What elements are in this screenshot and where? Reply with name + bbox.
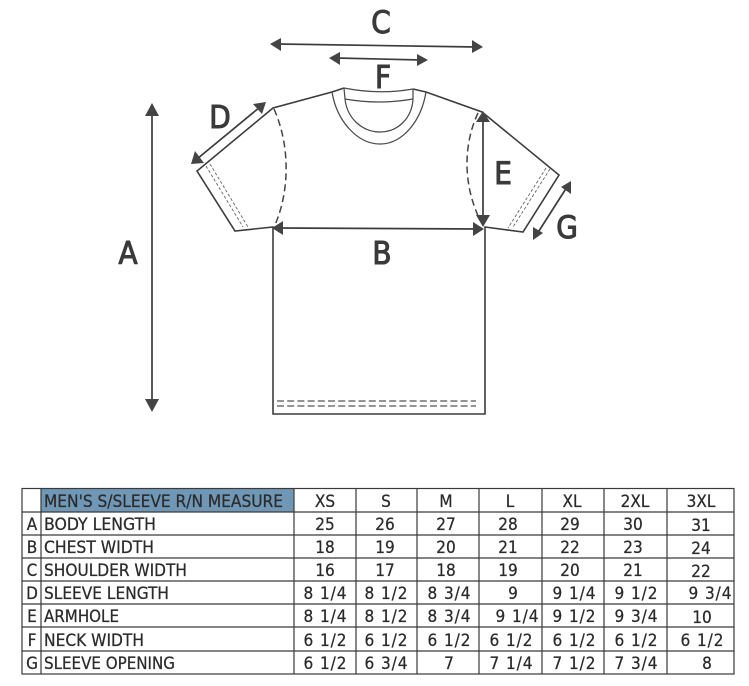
letter G: G: [556, 210, 578, 246]
row E: armhole: 9 1/4: [496, 607, 538, 627]
row C: shoulder width: SHOULDER WIDTH: [44, 561, 187, 581]
row A: body length: 26: [375, 515, 395, 535]
row D: sleeve length: 8 1/4: [304, 584, 346, 604]
row E: armhole: 8 1/4: [304, 607, 346, 627]
row G: sleeve opening: 7: [444, 654, 454, 674]
arrow B: chest width: [272, 221, 484, 236]
row F: neck width: 6 1/2: [680, 631, 724, 651]
sleeve hem stitching: [206, 164, 550, 228]
header row: S: [381, 492, 391, 512]
row C: shoulder width: 16: [315, 561, 335, 581]
row D: sleeve length: 9 1/2: [614, 584, 658, 604]
row B: chest width: 22: [560, 538, 580, 558]
row D: sleeve length: 9 3/4: [688, 584, 732, 604]
row D: sleeve length: D: [26, 584, 38, 604]
row C: shoulder width: 19: [498, 561, 518, 581]
header row: [44, 492, 716, 512]
row E: armhole: ARMHOLE: [44, 607, 119, 627]
row A: body length: 27: [436, 515, 456, 535]
arrow A: body length: [145, 103, 159, 412]
row E: armhole: 8 3/4: [428, 607, 470, 627]
row E: armhole: [27, 607, 712, 628]
header fill: [41, 488, 294, 512]
row G: sleeve opening: 7 1/4: [490, 654, 532, 674]
header row: MEN'S S/SLEEVE R/N MEASURE: [44, 492, 283, 512]
row A: body length: 31: [691, 516, 711, 536]
bottom hem stitching: [277, 401, 476, 406]
header row: 3XL: [687, 492, 716, 512]
row E: armhole: 8 1/2: [364, 607, 408, 627]
row B: chest width: 20: [436, 538, 456, 558]
row F: neck width: 6 1/2: [304, 631, 346, 651]
row G: sleeve opening: SLEEVE OPENING: [44, 654, 175, 674]
row C: shoulder width: C: [27, 561, 37, 581]
armhole seams: [274, 109, 480, 225]
header row: L: [506, 492, 515, 512]
row G: sleeve opening: 7 3/4: [614, 654, 658, 674]
row D: sleeve length: [26, 584, 732, 604]
row F: neck width: [28, 631, 724, 651]
row C: shoulder width: 17: [375, 561, 395, 581]
row B: chest width: [27, 538, 711, 559]
row D: sleeve length: SLEEVE LENGTH: [44, 584, 169, 604]
letter D: D: [209, 100, 231, 136]
row C: shoulder width: 20: [560, 561, 580, 581]
letter A: A: [118, 236, 138, 272]
arrow D: sleeve length: [191, 102, 266, 164]
row G: sleeve opening: G: [26, 654, 38, 674]
row G: sleeve opening: 6 3/4: [364, 654, 408, 674]
letter C: C: [371, 5, 391, 41]
row E: armhole: E: [27, 607, 37, 627]
row B: chest width: 23: [623, 538, 643, 558]
row B: chest width: 19: [375, 538, 395, 558]
table grid: [22, 488, 734, 674]
arrow C: shoulder width: [270, 38, 483, 53]
row F: neck width: 6 1/2: [614, 631, 658, 651]
row F: neck width: 6 1/2: [490, 631, 532, 651]
row A: body length: A: [27, 515, 38, 535]
header row: XL: [562, 492, 582, 512]
row B: chest width: 24: [691, 539, 711, 559]
row D: sleeve length: 9 1/4: [552, 584, 596, 604]
row F: neck width: NECK WIDTH: [44, 631, 144, 651]
row B: chest width: B: [27, 538, 37, 558]
size table: [22, 488, 734, 674]
row F: neck width: 6 1/2: [428, 631, 470, 651]
row A: body length: 30: [623, 515, 643, 535]
row C: shoulder width: 21: [623, 561, 643, 581]
row C: shoulder width: 18: [436, 561, 456, 581]
row G: sleeve opening: 7 1/2: [552, 654, 596, 674]
row F: neck width: 6 1/2: [552, 631, 596, 651]
row G: sleeve opening: 8: [702, 654, 712, 674]
header row: XS: [315, 492, 335, 512]
row A: body length: 25: [315, 515, 335, 535]
arrow F: neck width: [329, 52, 428, 66]
row A: body length: [27, 515, 711, 536]
row C: shoulder width: [27, 561, 711, 582]
header row: 2XL: [621, 492, 650, 512]
row A: body length: BODY LENGTH: [44, 515, 156, 535]
row E: armhole: 10: [692, 608, 712, 628]
letter F: F: [375, 60, 391, 96]
row D: sleeve length: 8 3/4: [428, 584, 470, 604]
arrow G: sleeve opening: [533, 181, 571, 240]
row B: chest width: 18: [315, 538, 335, 558]
row C: shoulder width: 22: [691, 562, 711, 582]
collar: [332, 88, 426, 144]
row D: sleeve length: 9: [508, 584, 518, 604]
row E: armhole: 9 3/4: [614, 607, 658, 627]
row F: neck width: 6 1/2: [364, 631, 408, 651]
letter B: B: [372, 236, 392, 272]
row D: sleeve length: 8 1/2: [364, 584, 408, 604]
row B: chest width: CHEST WIDTH: [44, 538, 154, 558]
header row: M: [439, 492, 453, 512]
row A: body length: 29: [560, 515, 580, 535]
row E: armhole: 9 1/2: [552, 607, 596, 627]
row G: sleeve opening: [26, 654, 712, 674]
t-shirt outline: [197, 88, 559, 414]
row B: chest width: 21: [498, 538, 518, 558]
arrow E: armhole: [476, 111, 490, 227]
row G: sleeve opening: 6 1/2: [304, 654, 346, 674]
row A: body length: 28: [498, 515, 518, 535]
t-shirt diagram: [197, 88, 559, 414]
letter E: E: [494, 156, 512, 192]
row F: neck width: F: [28, 631, 36, 651]
